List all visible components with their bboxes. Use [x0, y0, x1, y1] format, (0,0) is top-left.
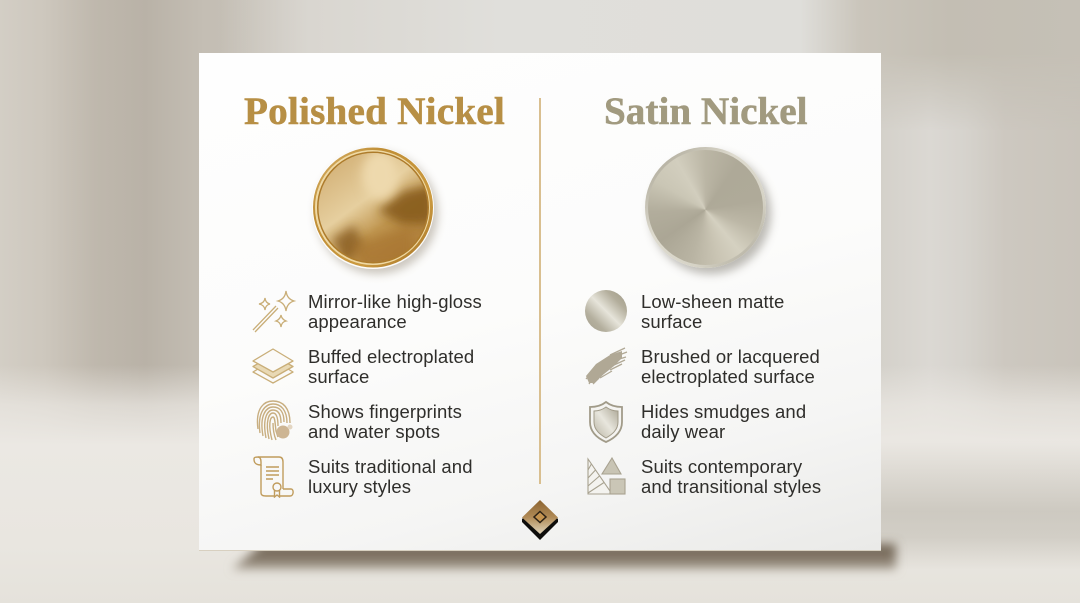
right floor shade [860, 440, 1080, 570]
text: hides smudges: daily wear [641, 421, 725, 442]
icon: fingerprint with water drop [256, 400, 292, 440]
top strip [248, 0, 1046, 110]
heading: Satin Nickel: Satin Nickel [604, 90, 808, 133]
text: buffed: surface [308, 366, 369, 387]
icon: shield [589, 401, 623, 443]
icon: diamond emblem [522, 500, 558, 540]
text: brushed: Brushed or lacquered [641, 346, 820, 367]
heading: Polished Nickel: Polished Nickel [244, 90, 505, 133]
text: traditional [308, 456, 473, 497]
text: hides smudges: Hides smudges and [641, 401, 806, 422]
text: brushed [641, 346, 820, 387]
text: traditional: Suits traditional and [308, 456, 473, 477]
text: traditional: luxury styles [308, 476, 411, 497]
text: mirror-like [308, 291, 482, 332]
icon: layers [252, 348, 294, 384]
text: buffed: Buffed electroplated [308, 346, 474, 367]
icon: magic wand sparkles [252, 290, 296, 332]
floor [0, 365, 1080, 603]
text: fingerprints [308, 401, 462, 442]
text: brushed: electroplated surface [641, 366, 815, 387]
swatch: satin nickel disc [645, 147, 766, 268]
text: contemporary [641, 456, 821, 497]
text: low-sheen [641, 291, 784, 332]
text: contemporary: Suits contemporary [641, 456, 802, 477]
brushed conic face [648, 150, 763, 265]
text: low-sheen: surface [641, 311, 702, 332]
icon: brush stroke [586, 347, 628, 384]
swatch: polished gold disc [312, 147, 434, 269]
text: contemporary: and transitional styles [641, 476, 821, 497]
icon: geometric shapes [587, 457, 626, 495]
text: hides smudges [641, 401, 806, 442]
text: fingerprints: Shows fingerprints [308, 401, 462, 422]
center divider [539, 98, 541, 484]
text: mirror-like: Mirror-like high-gloss [308, 291, 482, 312]
icon: scroll certificate [253, 456, 294, 498]
panel: comparison card [199, 53, 881, 550]
text: fingerprints: and water spots [308, 421, 440, 442]
text: mirror-like: appearance [308, 311, 407, 332]
text: low-sheen: Low-sheen matte [641, 291, 784, 312]
text: buffed [308, 346, 474, 387]
icon: satin sheen circle [585, 290, 627, 332]
